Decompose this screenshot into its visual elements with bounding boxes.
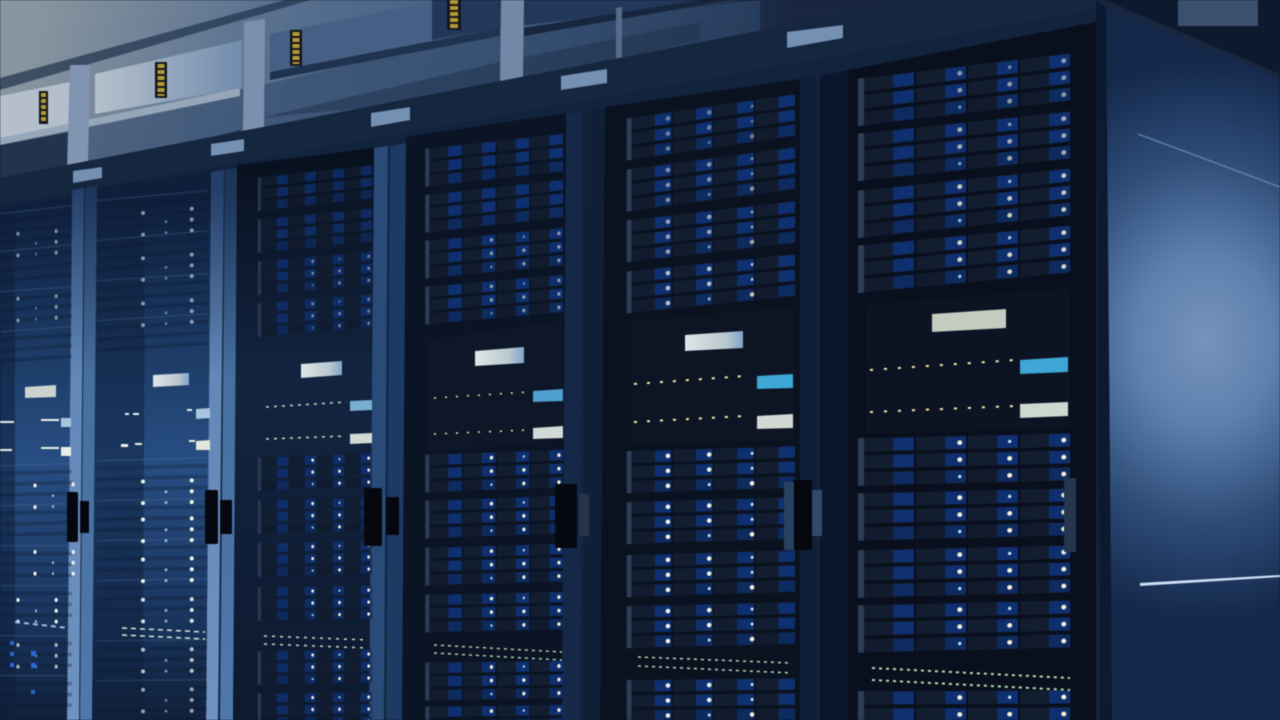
side panel of the end cabinet [1106,8,1280,720]
rack 3 indicator lines [264,402,368,648]
rack 2 [92,172,211,720]
ceiling background [0,0,1280,220]
rack 1 blue status lights [10,641,36,694]
rack 1 indicator rows [0,418,71,456]
rack 6 indicator lines [872,668,1070,690]
rack 5 [600,79,800,720]
ceiling cable trunking [0,0,730,145]
rack 5 indicator lines [638,657,792,673]
rack 3 [233,148,374,720]
rack 1 [0,198,75,720]
side panel light seam [1140,575,1280,586]
top right ceiling equipment [1105,0,1280,74]
trunking connector 4 [447,0,461,30]
rack 4 indicator lines [434,392,562,660]
rack top band [0,0,1105,205]
trunking connector 3 [290,30,302,66]
rack 2 indicator rows [121,409,195,447]
rack 2 displays [153,373,210,450]
rack 6 displays [870,309,1068,418]
ceiling support posts [67,0,622,168]
rack 1 display [25,385,56,398]
door handles [67,478,1076,552]
door frames [67,70,848,720]
trunking connector 1 [39,91,48,124]
side panel frame [1096,0,1112,720]
side panel upper seam [1138,134,1280,187]
trunking connector 2 [155,62,167,98]
rack 6 [848,22,1096,720]
rack top label tags [73,25,843,183]
rack 4 displays [475,347,563,439]
rack 4 [402,113,566,720]
rack 3 displays [301,361,372,444]
rack 5 displays [634,331,793,429]
